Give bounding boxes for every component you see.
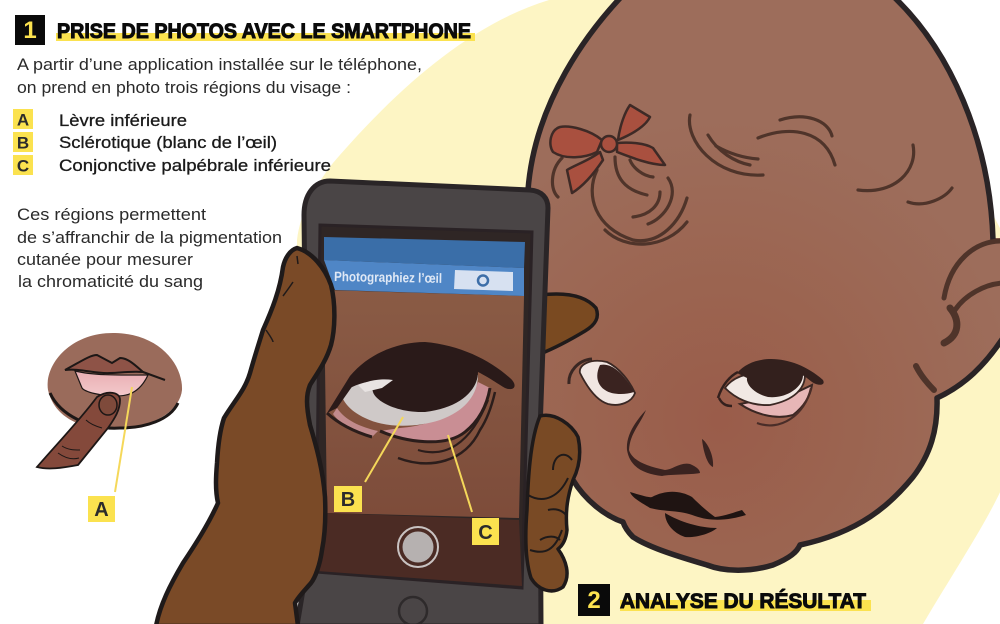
eyelid lines — [327, 388, 490, 442]
item A — [13, 109, 187, 130]
bow — [550, 105, 665, 193]
label C: C — [478, 522, 493, 544]
phone body — [297, 181, 548, 624]
explanatory text — [17, 205, 282, 291]
hand thumb in front of the phone — [156, 248, 334, 624]
section 2 heading — [578, 584, 871, 616]
explanatory text: de s’affranchir de la pigmentation — [17, 228, 282, 247]
head outline — [528, 0, 1000, 570]
phone — [297, 181, 548, 624]
section 2 heading: 2 — [587, 587, 601, 614]
lower eyelid, conjunctiva — [380, 382, 490, 442]
eye on screen — [327, 342, 515, 463]
screen frame — [316, 225, 532, 588]
section 1 heading — [15, 15, 475, 45]
blue app header — [324, 237, 525, 296]
legend list — [13, 109, 331, 176]
baby left eye — [569, 359, 635, 405]
label line A — [115, 387, 132, 492]
head fill — [528, 0, 1000, 570]
item A: Lèvre inférieure — [59, 111, 187, 130]
upper lid and iris — [350, 342, 515, 412]
fingers on the right of the phone — [526, 415, 580, 591]
explanatory text: Ces régions permettent — [17, 205, 206, 224]
section 1 heading: PRISE DE PHOTOS AVEC LE SMARTPHONE — [57, 20, 471, 43]
shutter button — [398, 527, 438, 567]
photo of the eye background — [324, 290, 524, 518]
label B — [334, 486, 362, 512]
background: cream shape — [297, 0, 1000, 624]
label B: B — [341, 489, 355, 511]
sclera — [342, 370, 478, 426]
label C — [472, 518, 499, 545]
explanatory text: cutanée pour mesurer — [17, 250, 193, 269]
lower lip, pink — [75, 371, 148, 396]
face patch — [48, 333, 182, 429]
section 2 heading: ANALYSE DU RÉSULTAT — [620, 588, 866, 613]
label A: A — [94, 499, 109, 521]
upper lip — [65, 355, 143, 373]
intro text — [17, 55, 422, 97]
item A: A — [17, 110, 29, 130]
lip illustration — [37, 333, 182, 522]
mouth corner line — [143, 372, 165, 380]
hair strokes — [552, 115, 952, 244]
intro text: on prend en photo trois régions du visage : — [17, 78, 351, 97]
finger — [37, 393, 120, 468]
label A — [88, 496, 115, 522]
blue app header: Photographiez l’œil — [334, 269, 442, 286]
home button — [399, 597, 427, 624]
baby right eye — [718, 359, 824, 425]
item C: Conjonctive palpébrale inférieure — [59, 156, 331, 175]
baby head — [528, 0, 1000, 570]
eye highlight — [358, 379, 393, 392]
item C: C — [17, 156, 29, 176]
intro text: A partir d’une application installée sur le téléphone, — [17, 55, 422, 74]
baby mouth — [630, 492, 746, 537]
face patch lower edge — [50, 393, 178, 428]
ear — [916, 241, 1000, 390]
bottom camera bar — [317, 513, 522, 586]
label line B — [365, 417, 403, 482]
baby nose — [627, 410, 713, 476]
explanatory text: la chromaticité du sang — [18, 272, 203, 291]
thumb piece of the finger behind the phone — [540, 294, 597, 354]
label line C — [448, 435, 472, 512]
section 1 heading: 1 — [23, 17, 37, 44]
item B: Sclérotique (blanc de l’œil) — [59, 133, 277, 152]
item B: B — [17, 134, 29, 152]
